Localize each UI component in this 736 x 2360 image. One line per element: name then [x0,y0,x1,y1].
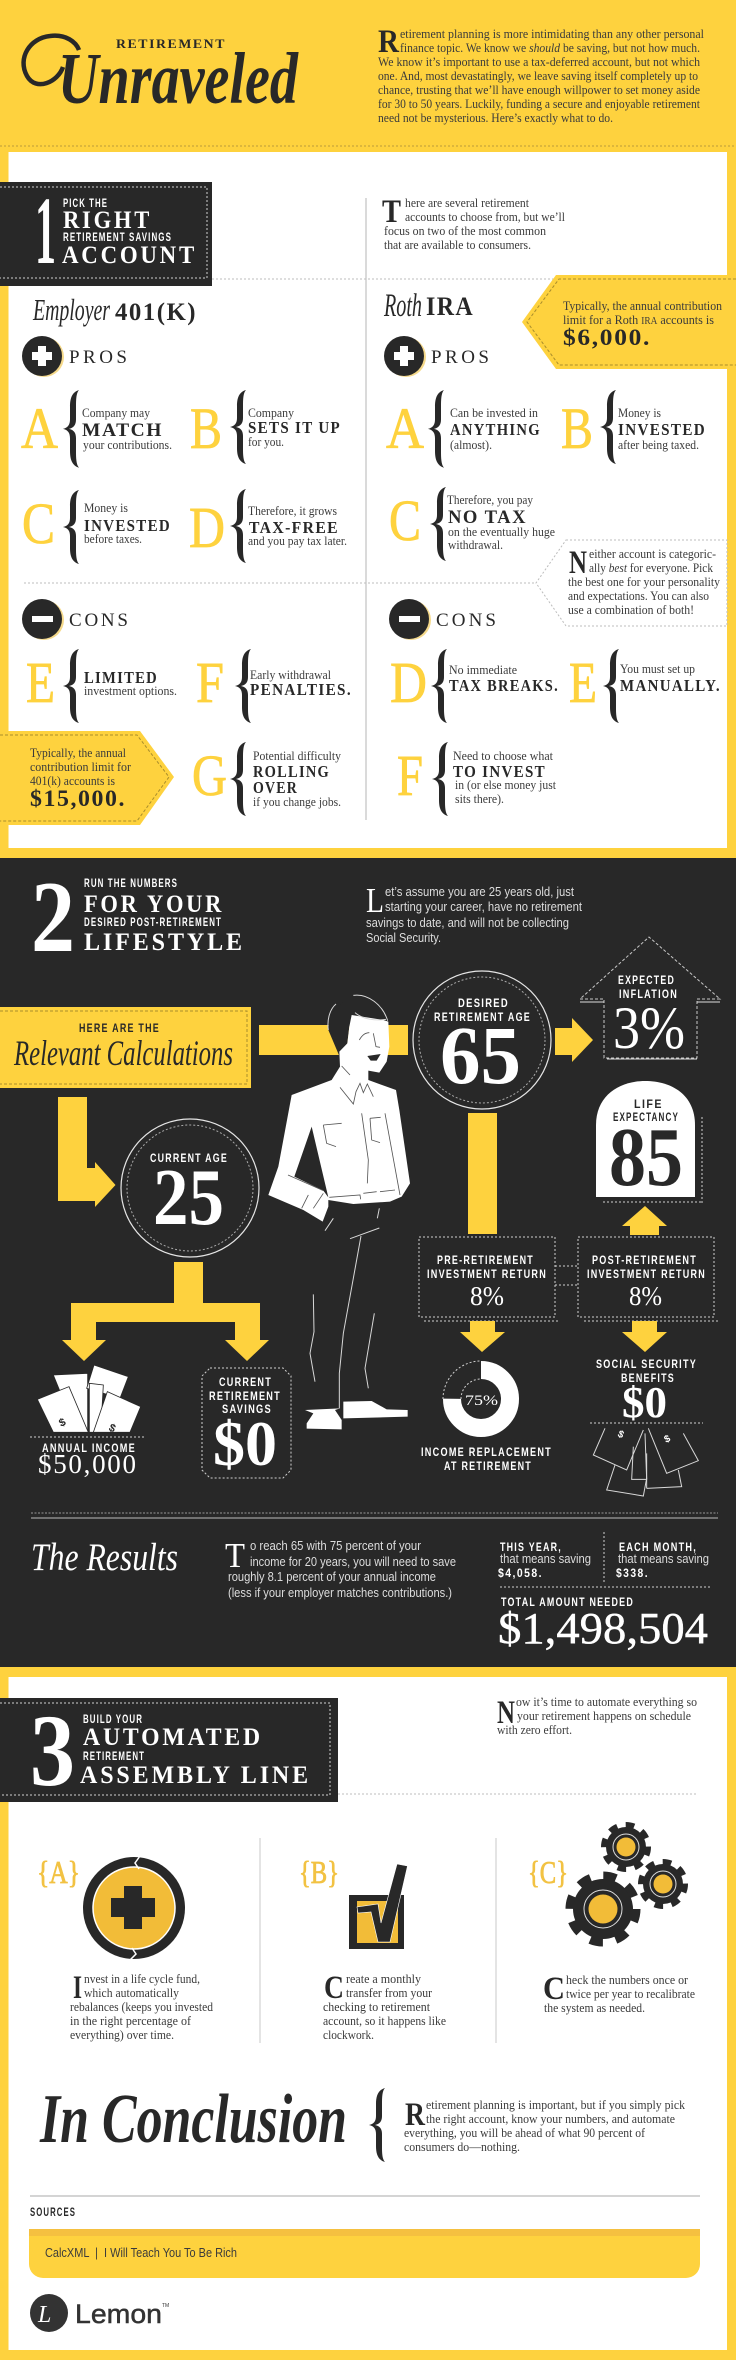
the results heading: The Results [31,1535,178,1579]
sources label: SOURCES [30,2207,76,2219]
income replacement label [421,1447,552,1473]
tombstone: life expectancy: EXPECTANCY [613,1112,679,1124]
step B text: account, so it happens like [323,2013,446,2028]
roth pro C [389,487,555,561]
step B text: C [324,1970,344,2006]
circle: current age: CURRENT AGE [150,1153,228,1165]
income replacement label: AT RETIREMENT [444,1461,532,1473]
lemon logo: Lemon [75,2299,162,2329]
step 1 intro text: that are available to consumers. [384,237,531,252]
step B text: checking to retirement [323,1999,430,2014]
icon: cons, roth [389,599,496,640]
step B text: transfer from your [346,1985,433,2000]
result: this year: THIS YEAR, [500,1542,562,1554]
banner: relevant calculations: Relevant Calculations [13,1033,233,1074]
step A text: nvest in a life cycle fund, [84,1971,200,1986]
roth ira heading: IRA [426,292,474,321]
step 3 intro text [497,1694,697,1737]
employer con F: PENALTIES. [250,680,352,699]
employer con G: ROLLING [253,762,330,781]
illustration: man [268,995,410,1429]
roth pro B [561,390,706,464]
roth pro A: ANYTHING [450,420,541,439]
box: current retirement savings: SAVINGS [222,1404,272,1416]
roth pro B: INVESTED [618,420,706,439]
icon: pros, roth: PROS [431,347,489,368]
step C text [543,1971,695,2015]
results paragraph: o reach 65 with 75 percent of your [250,1539,421,1553]
circle: current age [121,1119,259,1257]
step A text: everything) over time. [70,2027,174,2042]
panel: step 2 [0,858,736,1667]
icon: outlined money: $ [663,1433,673,1446]
roth pro A: A [386,396,424,461]
employer con F [196,649,352,723]
step 1 heading badge: RIGHT [63,207,152,234]
step 2 intro text: savings to date, and will not be collecting [366,916,569,930]
icon: pros, employer: PROS [69,347,127,368]
employer pro B: B [190,396,222,461]
roth pro B: B [561,396,593,461]
employer pro D: and you pay tax later. [248,533,347,548]
step 3 intro text: your retirement happens on schedule [517,1708,691,1723]
employer con F: Early withdrawal [250,667,331,682]
employer pro B: SETS IT UP [248,418,341,437]
employer 401(k) heading: Employer [32,293,110,327]
header intro paragraph: We know it’s important to use a tax-deferred account, but not which [378,54,700,69]
icon: outlined money: $ [616,1429,626,1441]
box: current retirement savings [202,1368,291,1479]
callout: roth limit: $6,000. [563,325,651,350]
employer pro A: Company may [82,405,150,420]
circle: desired retirement age: RETIREMENT AGE [434,1012,531,1024]
employer pro C: before taxes. [84,531,142,546]
employer pro C: Money is [84,500,128,515]
roth con D: TAX BREAKS. [449,676,559,695]
roth pro B: Money is [618,405,661,420]
callout: roth limit: limit for a Roth IRA accounts is [563,312,714,327]
employer pro A [21,390,172,468]
conclusion text: the right account, know your numbers, and automate [426,2111,675,2126]
employer con G: if you change jobs. [253,794,341,809]
result: this year [498,1542,591,1580]
in conclusion heading: In Conclusion [39,2080,347,2157]
arrow: to social security [622,1321,667,1352]
lemon logo: TM [162,2303,169,2309]
arrow: retirement age down [468,1113,497,1234]
header intro paragraph: finance topic. We know we should be saving, but not how much. [400,40,700,55]
roth ira heading: Roth [383,288,422,324]
conclusion text: everything, you will be ahead of what 90 percent of [404,2125,646,2140]
box: post-retirement return: 8% [629,1281,662,1311]
callout: 401(k) limit: $15,000. [30,786,126,811]
icon: outlined money [593,1428,698,1496]
roth pro B: after being taxed. [618,437,699,452]
employer pro C: INVESTED [84,516,171,535]
employer pro D [189,489,347,563]
box: post-retirement return [555,1237,720,1321]
step C text: twice per year to recalibrate [566,1986,695,2001]
step 1 heading badge: RETIREMENT SAVINGS [63,232,172,244]
callout: neither account: use a combination of both! [568,602,694,617]
step A text [70,1970,213,2042]
callout: neither account: the best one for your personality [568,574,720,589]
employer con G [192,742,341,816]
results paragraph: roughly 8.1 percent of your annual income [228,1570,436,1584]
box: pre-retirement return: 8% [470,1281,504,1311]
roth con E: MANUALLY. [620,676,721,695]
icon: gears [570,1825,685,1942]
step 2 heading: 2 [31,861,75,974]
step C text: the system as needed. [544,2000,645,2015]
roth pro C: withdrawal. [448,537,503,552]
step 2 heading [31,861,245,974]
banner: relevant calculations [0,1007,251,1088]
step 1 intro text: here are several retirement [405,195,529,210]
header intro paragraph: etirement planning is more intimidating than any other personal [400,26,704,41]
roth con F: in (or else money just [455,777,556,792]
step 2 intro text [366,881,582,945]
sources bar: CalcXML | I Will Teach You To Be Rich [45,2245,237,2260]
conclusion text: consumers do—nothing. [404,2139,520,2154]
banner: relevant calculations: HERE ARE THE [79,1023,160,1035]
step A text: in the right percentage of [70,2013,192,2028]
roth ira heading [383,288,474,324]
lemon logo: L [37,2302,51,2328]
icon: cons, employer: CONS [69,610,128,631]
step 2 heading: DESIRED POST-RETIREMENT [84,917,222,929]
social security benefits [590,1359,703,1427]
roth pro A [386,390,541,468]
result: each month: EACH MONTH, [619,1542,697,1554]
result: each month: that means saving [618,1552,709,1566]
header intro paragraph: one. And, most devastatingly, we leave saving itself completely up to [378,68,698,83]
arrow: banner to current age [58,1097,116,1207]
header intro paragraph [378,24,704,125]
social security benefits: BENEFITS [621,1373,675,1385]
employer pro B: for you. [248,434,284,449]
conclusion text: R [405,2097,426,2133]
employer pro B [190,390,341,464]
roth con E [569,649,721,723]
icon: cons, roth: CONS [436,610,496,631]
employer pro D: D [189,495,225,560]
box: current retirement savings: $0 [213,1408,277,1479]
roth con F: TO INVEST [453,762,546,781]
step 1 heading badge [0,177,212,286]
conclusion text [404,2097,685,2154]
arrow: up to life expectancy [622,1206,667,1235]
icon: money pile: $ [57,1416,68,1430]
employer pro B: Company [248,405,294,420]
icon: pros, roth [384,336,489,377]
circle: desired retirement age: DESIRED [458,998,509,1010]
callout: neither account: and expectations. You can also [568,588,709,603]
employer pro A: A [21,396,58,461]
step A text: I [73,1970,82,2006]
callout: 401(k) limit: 401(k) accounts is [30,773,115,788]
step 2 heading: LIFESTYLE [84,929,245,956]
roth con E: You must set up [620,661,695,676]
roth con E: E [569,650,597,715]
arrow: current age branching [62,1262,269,1361]
box: post-retirement return: INVESTMENT RETURN [587,1269,706,1281]
step 1 intro text: accounts to choose from, but we’ll [405,209,565,224]
social security benefits: SOCIAL SECURITY [596,1359,697,1371]
callout: roth limit: Typically, the annual contribution [563,298,722,313]
roth con D: D [390,650,427,715]
roth pro A: (almost). [450,437,492,452]
step 3 intro text: with zero effort. [497,1722,572,1737]
header intro paragraph: chance, trusting that we’ll have enough willpower to set money aside [378,82,700,97]
employer con E: E [26,650,55,715]
icon: checkbox [349,1864,408,1949]
callout: neither account: either account is categoric- [589,546,716,561]
step A text: which automatically [84,1985,179,2000]
step 1 heading badge: ACCOUNT [62,242,197,269]
roth con F: Need to choose what [453,748,553,763]
roth pro C: C [389,488,421,553]
employer con F: F [196,650,224,715]
employer pro D: TAX-FREE [249,518,339,537]
result: total amount needed: TOTAL AMOUNT NEEDED [501,1597,634,1609]
step 3 intro text: ow it’s time to automate everything so [516,1694,697,1709]
roth con F: sits there). [455,791,504,806]
result: each month: $338. [616,1568,649,1580]
callout: neither account [536,540,727,626]
roth pro C: Therefore, you pay [447,492,533,507]
employer con G: G [192,743,227,808]
house: expected inflation: 3% [613,995,685,1061]
step B text [323,1970,446,2042]
results paragraph: (less if your employer matches contributions.) [228,1586,452,1600]
employer con E: LIMITED [84,668,158,687]
step B text: clockwork. [323,2027,374,2042]
roth con D: No immediate [449,662,517,677]
employer pro A: MATCH [82,420,163,441]
step B label: {B} [299,1854,339,1890]
step 3 heading badge: AUTOMATED [83,1724,263,1751]
tombstone: life expectancy: 85 [609,1111,683,1204]
circle: current age: 25 [153,1154,224,1242]
step 1 intro text: T [382,194,401,230]
house: expected inflation: INFLATION [619,989,678,1001]
employer pro A: your contributions. [83,437,172,452]
social security benefits: $0 [622,1378,667,1427]
tombstone: life expectancy [596,1081,702,1204]
header intro paragraph: for 30 to 50 years. Luckily, funding a secure and enjoyable retirement [378,96,700,111]
employer pro D: Therefore, it grows [248,503,337,518]
employer con E: investment options. [84,683,177,698]
step 3 heading badge: RETIREMENT [83,1751,145,1763]
header title: RETIREMENT [116,36,226,51]
step 2 intro text: L [366,881,384,920]
step 1 intro text: focus on two of the most common [384,223,546,238]
step 1 intro text [382,194,565,252]
step 2 heading: FOR YOUR [84,891,224,918]
panel: step 1 [0,152,736,848]
callout: 401(k) limit: contribution limit for [30,759,132,774]
box: current retirement savings: CURRENT [219,1377,272,1389]
header intro paragraph: need not be mysterious. Here’s exactly what to do. [378,110,613,125]
conclusion text: etirement planning is important, but if you simply pick [426,2097,685,2112]
step A text: rebalances (keeps you invested [70,1999,213,2014]
employer 401(k) heading [32,293,197,327]
roth pro C: on the eventually huge [448,524,555,539]
employer 401(k) heading: 401(K) [115,299,197,326]
icon: cons, employer [22,599,128,640]
header intro paragraph: R [378,24,400,60]
roth pro C: NO TAX [448,507,527,528]
result: this year: $4,058. [498,1568,543,1580]
roth pro A: Can be invested in [450,405,538,420]
step A label: {A} [37,1854,80,1890]
box: post-retirement return: POST-RETIREMENT [592,1255,697,1267]
box: pre-retirement return: INVESTMENT RETURN [427,1269,547,1281]
result: each month [616,1542,709,1580]
icon: rebalancing fund [83,1856,185,1960]
callout: roth limit [522,275,736,369]
box: pre-retirement return [419,1237,558,1321]
box: pre-retirement return: PRE-RETIREMENT [437,1255,534,1267]
result: this year: that means saving [500,1552,591,1566]
circle: desired retirement age [413,971,551,1109]
step C text: heck the numbers once or [566,1972,689,1987]
roth con F: F [397,743,423,808]
result: total amount needed: $1,498,504 [498,1604,708,1653]
arrow: banner to retirement age [259,1025,408,1055]
step 2 intro text: Social Security. [366,931,441,945]
step 3 heading badge [0,1694,338,1808]
arrow: to inflation [555,1018,593,1062]
employer con G: OVER [253,778,298,797]
step 2 intro text: starting your career, have no retirement [385,900,582,914]
box: current retirement savings: RETIREMENT [209,1391,281,1403]
results paragraph: income for 20 years, you will need to save [250,1555,456,1569]
donut chart: income replacement 75% [443,1361,510,1428]
results paragraph [225,1536,456,1600]
panel: step 3 and conclusion [0,1677,727,2350]
lemon logo [30,2294,169,2332]
step B text: reate a monthly [346,1971,421,1986]
step 3 heading badge: ASSEMBLY LINE [80,1762,311,1789]
employer pro C: C [22,491,55,556]
step 1 heading badge: 1 [35,177,56,284]
callout: neither account: ally best for everyone. Pick [589,560,713,575]
income replacement label: INCOME REPLACEMENT [421,1447,552,1459]
icon: money pile [37,1365,141,1435]
brace: conclusion [369,2088,385,2162]
circle: desired retirement age: 65 [440,1009,521,1101]
step C text: C [543,1971,565,2007]
house: expected inflation: EXPECTED [618,975,675,987]
callout: 401(k) limit [0,731,174,825]
header title: Unraveled [58,39,299,120]
employer con G: Potential difficulty [253,748,341,763]
roth con F [397,742,556,816]
step 1 heading badge: PICK THE [63,198,108,210]
step 3 intro text: N [497,1695,515,1731]
donut chart: income replacement 75%: 75% [465,1393,498,1409]
step 3 heading badge: BUILD YOUR [83,1714,143,1726]
results paragraph: T [225,1536,245,1575]
employer pro C [22,490,171,564]
sources bar [29,2229,700,2278]
employer con E [26,649,177,723]
step 3 heading badge: 3 [30,1694,75,1808]
callout: neither account: N [569,545,587,581]
step 2 heading: RUN THE NUMBERS [84,878,178,890]
icon: pros, employer [22,336,127,377]
annual income [30,1437,146,1479]
house: expected inflation [580,937,720,1061]
annual income: $50,000 [38,1449,136,1479]
icon: money pile: $ [107,1422,117,1435]
arrow: to income replacement [460,1321,505,1352]
roth con D [390,649,559,723]
callout: 401(k) limit: Typically, the annual [30,745,126,760]
tombstone: life expectancy: LIFE [634,1099,663,1111]
annual income: ANNUAL INCOME [42,1443,136,1455]
step C label: {C} [528,1854,568,1890]
step 2 intro text: et’s assume you are 25 years old, just [385,885,574,899]
